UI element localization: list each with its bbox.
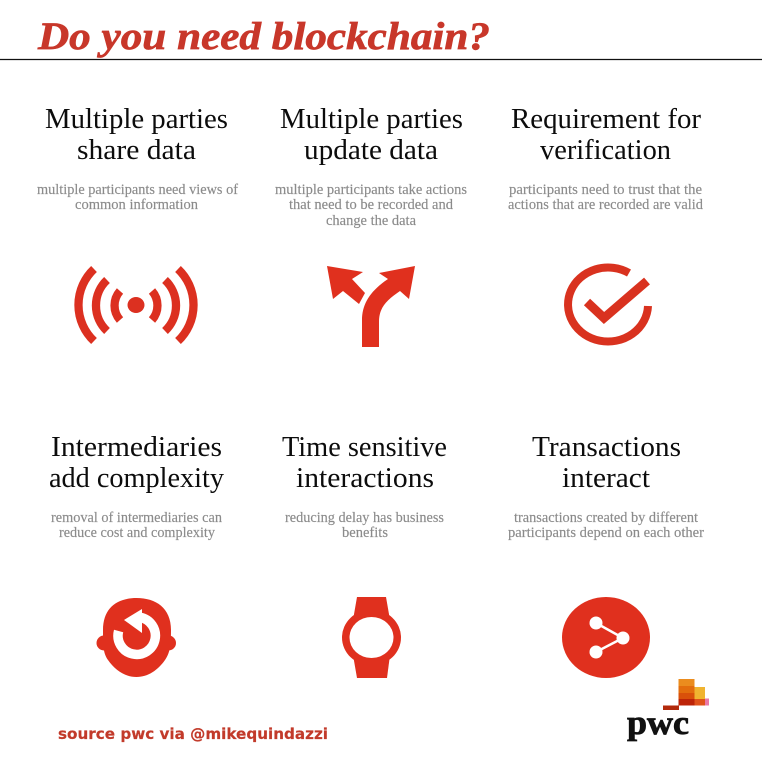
heading: time sensitive interactions: interactions [296,462,434,494]
text: verification description [508,182,704,213]
heading: requirement for verification [511,103,701,166]
panel: multiple parties update data [275,103,467,347]
heading: requirement for verification: verification [540,134,671,166]
text: share data description: multiple participants need views of [37,182,238,198]
title: Do you need blockchain? [37,15,490,58]
text: update data description [275,182,467,229]
heading: multiple parties update data: update data [304,134,438,166]
panel: requirement for verification [508,103,704,342]
text: time sensitive description [285,510,444,541]
text: transactions description: transactions created by different [514,510,698,526]
source credit: source pwc via @mikequindazzi [58,725,328,743]
heading: intermediaries add complexity: Intermediaries [51,431,222,463]
heading: multiple parties update data [280,103,463,166]
heading: multiple parties share data [45,103,228,166]
text: share data description: common information [75,197,199,213]
panel: transactions interact [508,431,704,678]
icon: check mark in circle [568,268,648,342]
heading: transactions interact: Transactions [532,431,681,463]
text: update data description: change the data [326,213,417,229]
text: verification description: actions that are recorded are valid [508,197,704,213]
text: time sensitive description: benefits [342,525,388,541]
heading: intermediaries add complexity: add complexity [49,462,224,494]
icon: broadcast signal [78,269,194,341]
heading: multiple parties share data: Multiple parties [45,103,228,135]
text: transactions description: participants depend on each other [508,525,704,541]
panel: intermediaries add complexity [49,431,224,677]
heading: time sensitive interactions [282,431,447,494]
logo: pwc: pwc [627,705,689,742]
text: transactions description [508,510,704,541]
heading: transactions interact [532,431,681,494]
text: update data description: that need to be recorded and [289,197,454,213]
text: intermediaries description: removal of intermediaries can [51,510,223,526]
heading: transactions interact: interact [562,462,650,494]
icon: wristwatch [342,597,401,678]
logo: pwc [627,679,709,742]
heading: time sensitive interactions: Time sensitive [282,431,447,463]
text: intermediaries description: reduce cost and complexity [59,525,216,541]
heading: multiple parties share data: share data [77,134,196,166]
text: intermediaries description [51,510,223,541]
panel: multiple parties share data [37,103,238,341]
text: time sensitive description: reducing delay has business [285,510,444,526]
text: share data description [37,182,238,213]
text: update data description: multiple participants take actions [275,182,467,198]
icon: share nodes in circle [562,597,650,678]
text: verification description: participants need to trust that the [509,182,702,198]
heading: multiple parties update data: Multiple parties [280,103,463,135]
icon: forking arrows [327,266,415,347]
panel: time sensitive interactions [282,431,447,678]
heading: requirement for verification: Requirement for [511,103,701,135]
icon: head with return arrow [96,598,176,677]
heading: intermediaries add complexity [49,431,224,494]
